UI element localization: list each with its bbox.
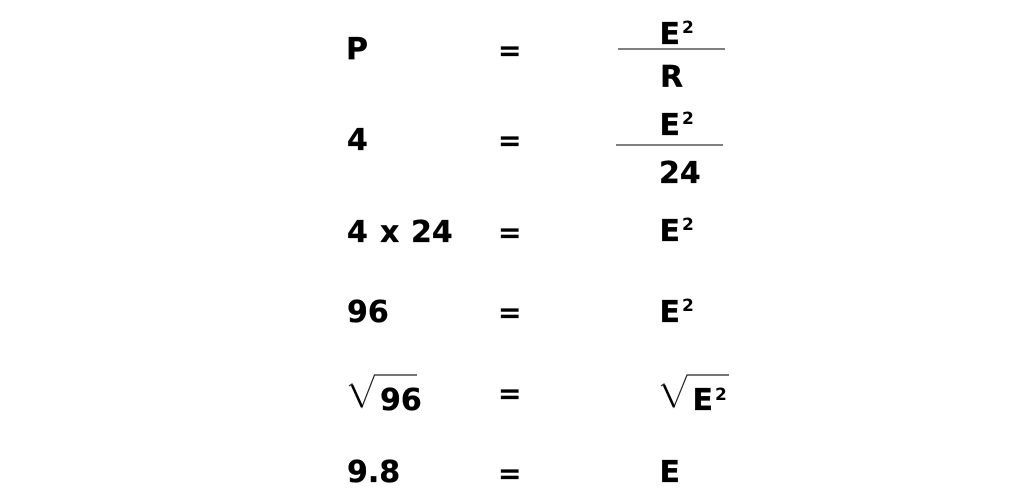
equation row 6: 9.8 = E — [347, 455, 680, 490]
equation row 6: 9.8 = E: 9.8 — [347, 455, 400, 490]
equation row 3: 4 x 24 = E squared — [347, 214, 694, 250]
equation row 4: 96 = E squared: E — [660, 295, 680, 330]
equation row 2: 4 = E squared over 24: 2 — [682, 109, 694, 129]
equation row 1: P = E squared over R: 2 — [682, 18, 694, 38]
equation row 3: 4 x 24 = E squared: 4 — [347, 215, 368, 250]
equation row 2: 4 = E squared over 24: 24 — [659, 156, 701, 191]
equation row 4: 96 = E squared: 2 — [682, 296, 694, 316]
equation row 3: 4 x 24 = E squared: x — [380, 215, 399, 250]
equation row 5: root 96 = root E squared: E — [692, 383, 713, 418]
equation row 2: 4 = E squared over 24 — [347, 108, 723, 191]
equation row 5: root 96 = root E squared: = — [498, 377, 521, 410]
equation row 5: root 96 = root E squared — [349, 375, 729, 418]
equation row 3: 4 x 24 = E squared: 24 — [411, 215, 453, 250]
equation row 2: 4 = E squared over 24: E — [660, 108, 680, 143]
equation row 6: 9.8 = E: = — [498, 457, 521, 490]
equation row 6: 9.8 = E: E — [660, 455, 680, 490]
equation row 1: P = E squared over R — [346, 17, 725, 95]
equation row 4: 96 = E squared: 96 — [347, 295, 389, 330]
equation row 2: 4 = E squared over 24: = — [498, 124, 521, 157]
equation row 2: 4 = E squared over 24: 4 — [347, 123, 368, 158]
equation row 5: root 96 = root E squared: 2 — [715, 385, 727, 405]
equation row 3: 4 x 24 = E squared: E — [660, 214, 680, 249]
equation row 4: 96 = E squared: = — [498, 296, 521, 329]
equation row 1: P = E squared over R: R — [660, 60, 683, 95]
equation row 1: P = E squared over R: = — [498, 34, 521, 67]
equation row 1: P = E squared over R: E — [660, 17, 680, 52]
equation row 4: 96 = E squared — [347, 295, 694, 330]
equation row 5: root 96 = root E squared: 96 — [380, 383, 422, 418]
equation row 1: P = E squared over R: P — [346, 32, 368, 67]
equation row 3: 4 x 24 = E squared: = — [498, 216, 521, 249]
equation row 3: 4 x 24 = E squared: 2 — [682, 215, 694, 235]
